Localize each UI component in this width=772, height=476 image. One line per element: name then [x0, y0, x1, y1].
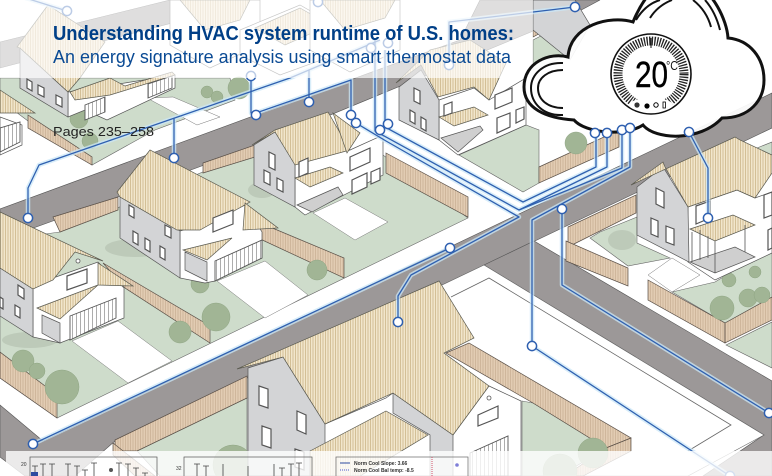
legend panel: Norm Cool Slope: 3.66: [354, 461, 408, 467]
legend panel: Norm Cool Bal temp: -8.5: [354, 468, 414, 474]
faint houses behind the title: [170, 0, 590, 75]
box plot panel 1: [21, 457, 157, 476]
legend panel: [336, 457, 468, 476]
thermostat mode icons: [634, 102, 665, 109]
house shadows on the lawn: [2, 182, 636, 348]
house: small left edge: [0, 90, 35, 155]
house: large foreground: [237, 281, 521, 476]
title backdrop: [0, 0, 533, 78]
page reference: Pages 235–258: [53, 124, 154, 139]
subtitle: An energy signature analysis using smart thermostat data: [53, 47, 512, 67]
box plot panel 2: [176, 457, 312, 476]
title: Understanding HVAC system runtime of U.S. homes:: [53, 23, 514, 45]
chart strip backdrop: [6, 451, 772, 476]
house: center: [252, 112, 383, 215]
house: top left: [17, 5, 175, 120]
house: left, mid block: [0, 212, 133, 343]
box plot panel 1: 20: [21, 462, 27, 468]
house: center right: [396, 40, 526, 155]
temperature reading: 20: [635, 54, 668, 95]
driveways: [72, 97, 700, 383]
house: right: [631, 137, 772, 280]
nodes on cloud: [590, 123, 694, 138]
cloud callout: [524, 0, 764, 136]
thermostat dial: [611, 34, 691, 114]
house: middle block: [117, 150, 278, 283]
temperature unit: °C: [666, 58, 678, 73]
box plot panel 2: 32: [176, 466, 182, 472]
